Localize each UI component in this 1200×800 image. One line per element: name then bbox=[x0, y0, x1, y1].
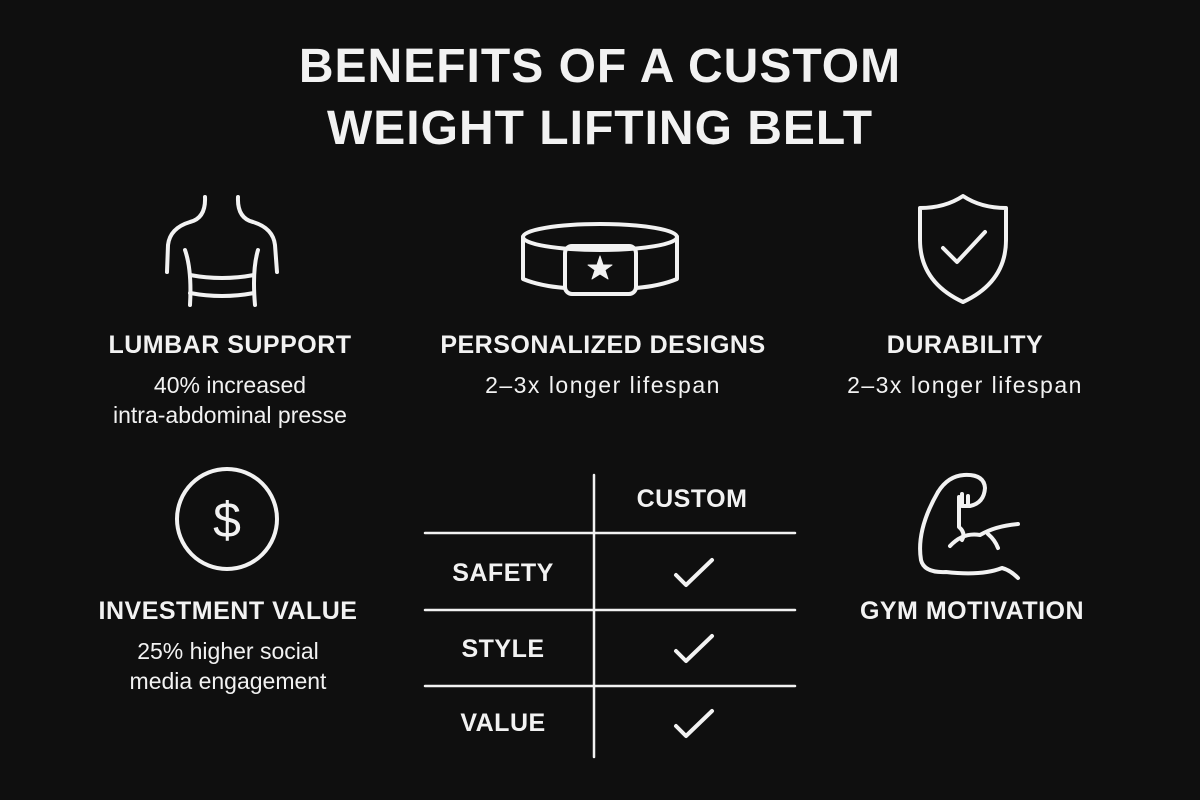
panel: lumbar support: 40% increased bbox=[154, 372, 306, 398]
panel: gym motivation: GYM MOTIVATION bbox=[860, 597, 1084, 625]
panel: lumbar support bbox=[108, 331, 352, 428]
text: VALUE bbox=[460, 709, 546, 737]
text: SAFETY bbox=[452, 559, 554, 587]
panel: durability: DURABILITY bbox=[887, 331, 1043, 359]
icon: dollar circle: $ bbox=[213, 492, 241, 548]
title: BENEFITS OF A CUSTOM bbox=[299, 40, 901, 93]
panel: durability bbox=[847, 331, 1083, 398]
title bbox=[299, 40, 901, 155]
panel: lumbar support: LUMBAR SUPPORT bbox=[108, 331, 352, 359]
table bbox=[425, 475, 795, 757]
icon: flexed arm bbox=[920, 475, 1018, 578]
panel: investment value bbox=[99, 597, 357, 694]
text: STYLE bbox=[461, 635, 545, 663]
icon: dollar circle bbox=[177, 469, 277, 569]
panel: personalized designs: 2–3x longer lifespan bbox=[485, 372, 721, 398]
icon: torso with belt bbox=[167, 197, 277, 305]
panel: investment value: INVESTMENT VALUE bbox=[99, 597, 357, 625]
table headers: CUSTOM bbox=[637, 485, 747, 513]
panel: lumbar support: intra-abdominal presse bbox=[113, 402, 347, 428]
title: WEIGHT LIFTING BELT bbox=[327, 102, 873, 155]
icon: belt with star bbox=[523, 224, 677, 294]
panel: personalized designs bbox=[440, 331, 766, 398]
icon: shield check bbox=[920, 196, 1006, 302]
panel: investment value: 25% higher social bbox=[137, 638, 319, 664]
panel: investment value: media engagement bbox=[130, 668, 326, 694]
panel: personalized designs: PERSONALIZED DESIGNS bbox=[440, 331, 766, 359]
panel: durability: 2–3x longer lifespan bbox=[847, 372, 1083, 398]
